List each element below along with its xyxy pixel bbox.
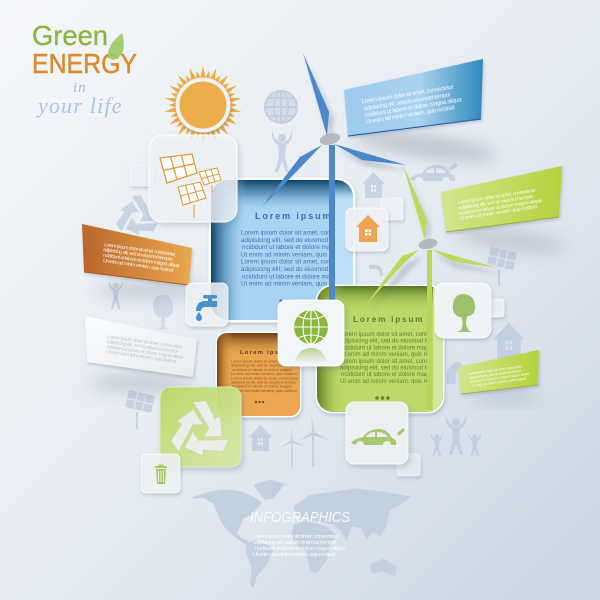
icon: ghost recycle bbox=[110, 195, 158, 242]
icon: house windows bbox=[365, 230, 371, 236]
text block: white ribbon: ncididunt ut labore et dolore magna aliqua bbox=[106, 344, 184, 361]
icon: tree bbox=[453, 294, 475, 332]
text block: green ribbon: adipisicing elit, sed do eiusmod tempor bbox=[458, 194, 534, 211]
text block: blue ribbon: Lorem ipsum dolor sit amet, consectetur bbox=[361, 85, 454, 105]
text block: orange ribbon: Ut enim ad minim veniam, quis nostrud bbox=[103, 258, 174, 274]
subtitle: in: in bbox=[73, 80, 87, 96]
title bbox=[32, 20, 137, 118]
ribbon shadows bbox=[88, 125, 566, 402]
text block: blue panel: adipisicing elit, sed do eiusmod tempor bbox=[241, 266, 350, 273]
icon: ghost solar panel right bbox=[487, 247, 517, 286]
text block: blue ribbon bbox=[361, 85, 463, 125]
text block: green panel: Ut enim ad minim veniam, quis nostrud bbox=[340, 352, 444, 358]
text block: green panel: Lorem ipsum dolor sit amet, consectetur bbox=[340, 359, 447, 365]
dots: orange panel bbox=[255, 401, 264, 403]
icon: solar panels bbox=[160, 154, 221, 218]
wind turbine: green bbox=[364, 165, 502, 410]
world map bbox=[190, 479, 412, 588]
card: house bbox=[346, 208, 388, 251]
text block: blue panel: Ut enim ad minim veniam, quis nostrud bbox=[241, 251, 350, 258]
icon: ghost house bottom bbox=[249, 425, 272, 451]
text block: blue panel: ncididunt ut labore et dolore magna bbox=[242, 244, 341, 251]
text block: small green ribbon: adipisicing elit, sed do eiusmod tempor bbox=[469, 369, 522, 380]
text block: green ribbon bbox=[457, 188, 542, 222]
small tile: house bbox=[381, 198, 403, 220]
text block: orange panel: ncididunt ut labore et dolore magna bbox=[232, 385, 292, 389]
icon: globe reflection bbox=[295, 348, 327, 364]
icon: house bbox=[356, 215, 380, 242]
card: electric car bbox=[346, 402, 408, 464]
text block: green panel: adipisicing elit, sed do eiusmod tempor bbox=[340, 366, 443, 372]
text block: infographics body: Ut enim ad minim veniam, quis nostrud bbox=[253, 552, 335, 558]
ribbon: orange bbox=[82, 224, 192, 285]
small tile: solar bbox=[130, 165, 153, 186]
text block: orange panel: adipisicing elit, sed do eiusmod tempor bbox=[231, 380, 297, 384]
dots: blue panel bbox=[279, 299, 295, 303]
icon: recycling arrows bbox=[163, 401, 229, 465]
text block: orange panel: Ut enim ad minim veniam, quis nostrud bbox=[231, 389, 297, 393]
text block: orange ribbon: Lorem ipsum dolor sit amet, consectetur bbox=[104, 242, 176, 258]
text block: white ribbon: Lorem ipsum dolor sit amet, consectetur bbox=[107, 334, 183, 351]
wind turbine: blue bbox=[262, 53, 408, 302]
ribbon: white bbox=[85, 316, 197, 377]
icon: ghost person left bbox=[109, 280, 123, 309]
ribbon: small green bbox=[458, 350, 539, 394]
text block: orange panel: adipisicing elit, sed do eiusmod tempor bbox=[231, 364, 297, 368]
ribbon: blue bbox=[344, 59, 483, 136]
icon: trash bin bbox=[155, 464, 167, 484]
title word: ENERGY: ENERGY bbox=[32, 48, 137, 79]
heading: green panel: Lorem ipsum bbox=[353, 314, 424, 324]
icon: ghost tree bbox=[153, 295, 173, 330]
dots: green panel bbox=[375, 396, 390, 400]
icon: ghost small wind turbine bbox=[280, 427, 305, 468]
text block: green panel: adipisicing elit, sed do eiusmod tempor bbox=[340, 339, 443, 345]
text block: orange ribbon: adipisicing elit, sed do eiusmod tempor bbox=[103, 247, 173, 263]
subtitle: your life: your life bbox=[36, 93, 123, 118]
small tile: car bbox=[397, 454, 420, 476]
text block: blue panel: Lorem ipsum dolor sit amet, consectetur bbox=[241, 230, 353, 236]
icon: electric car bbox=[351, 428, 405, 445]
text block: green ribbon: Lorem ipsum dolor sit amet, consectetur bbox=[457, 188, 537, 206]
text block: infographics body: Lorem ipsum dolor sit amet, consectetur bbox=[253, 534, 339, 540]
panel: green text window bbox=[316, 284, 447, 414]
card: globe bbox=[278, 300, 344, 366]
panel: blue text window bbox=[208, 178, 356, 322]
text block: orange panel: ncididunt ut labore et dolore magna bbox=[232, 368, 292, 372]
icon: sun bbox=[164, 66, 242, 144]
text block: white ribbon: Ut enim ad minim veniam, quis nostrud bbox=[106, 349, 177, 365]
icon: ghost water tap small bbox=[447, 362, 463, 384]
background icons bbox=[109, 91, 525, 468]
text block: blue panel bbox=[241, 230, 329, 287]
text block: orange ribbon: ncididunt ut labore et dolore magna aliqua bbox=[103, 253, 180, 269]
text block: white ribbon: adipisicing elit, sed do eiusmod tempor bbox=[106, 339, 179, 355]
text block: orange panel bbox=[231, 360, 299, 393]
card: recycling bbox=[160, 387, 241, 467]
icon: globe bbox=[294, 310, 328, 344]
text block: orange panel: Ut enim ad minim veniam, quis nostrud bbox=[231, 372, 297, 376]
text block: infographics body bbox=[253, 534, 346, 558]
text block: green panel bbox=[340, 332, 427, 384]
title word: Green: Green bbox=[32, 20, 108, 51]
text block: green panel: ncididunt ut labore et dolore magna bbox=[341, 372, 436, 378]
card: solar panels bbox=[149, 135, 237, 222]
text block: small green ribbon bbox=[468, 364, 530, 388]
heading: blue panel: Lorem ipsum bbox=[255, 211, 332, 221]
text block: infographics body: ncididunt ut labore et dolore magna aliqua bbox=[255, 546, 346, 552]
text block: orange ribbon bbox=[103, 242, 180, 274]
card: trash bbox=[141, 454, 180, 493]
icon: ghost large wind turbine bbox=[298, 415, 329, 467]
icon: water tap bbox=[196, 295, 217, 321]
text block: green ribbon: ncididunt ut labore et dolore magna aliqua bbox=[458, 198, 542, 217]
text block: blue ribbon: adipisicing elit, sed do eiusmod tempor bbox=[363, 92, 451, 112]
small tile: tree bbox=[487, 299, 504, 317]
text block: blue panel: adipisicing elit, sed do eiusmod tempor bbox=[241, 237, 350, 244]
icon: ghost house right bbox=[493, 323, 525, 358]
text block: orange panel: Lorem ipsum dolor sit amet, consectetur bbox=[231, 376, 299, 380]
text block: blue panel: Lorem ipsum dolor sit amet, consectetur bbox=[241, 259, 353, 266]
icon: ghost car bbox=[410, 163, 458, 181]
text block: blue ribbon: Ut enim ad minim veniam, quis nostrud bbox=[365, 105, 455, 125]
infographics caption bbox=[250, 510, 350, 558]
heading: infographics: INFOGRAPHICS bbox=[250, 510, 350, 526]
card: water tap bbox=[186, 283, 228, 326]
icon: ghost tap bbox=[369, 265, 383, 276]
icon: ghost house top bbox=[362, 172, 385, 198]
text block: orange panel: Lorem ipsum dolor sit amet, consectetur bbox=[231, 360, 299, 364]
text block: green panel: Ut enim ad minim veniam, quis nostrud bbox=[340, 379, 444, 385]
text block: green ribbon: Ut enim ad minim veniam, quis nostrud bbox=[459, 204, 538, 222]
text block: white ribbon bbox=[106, 334, 184, 365]
text block: small green ribbon: ncididunt ut labore et dolore magna aliqua bbox=[470, 372, 530, 384]
ribbon: green bbox=[441, 166, 562, 232]
icon: ghost person bbox=[272, 130, 292, 172]
panel: orange text window bbox=[216, 332, 302, 418]
text block: blue panel: Ut enim ad minim veniam, quis nostrud bbox=[241, 281, 350, 288]
icon: ghost solar panel left bbox=[125, 390, 155, 429]
text block: infographics body: adipisicing elit, sed do eiusmod tempor bbox=[253, 540, 336, 546]
icon: ghost globe bbox=[265, 91, 297, 123]
text block: small green ribbon: Ut enim ad minim veniam, quis nostrud bbox=[472, 376, 527, 388]
card: tree bbox=[435, 283, 491, 338]
icon: ghost people group bbox=[430, 415, 481, 456]
text block: blue ribbon: ncididunt ut labore et dolore magna aliqua bbox=[364, 97, 463, 119]
icon: leaf bbox=[108, 33, 124, 60]
text block: green panel: ncididunt ut labore et dolore magna bbox=[341, 345, 436, 351]
text block: green panel: Lorem ipsum dolor sit amet, consectetur bbox=[340, 332, 447, 338]
heading: orange panel: Lorem ipsum bbox=[240, 350, 291, 356]
text block: blue panel: ncididunt ut labore et dolore magna bbox=[242, 273, 341, 280]
text block: small green ribbon: Lorem ipsum dolor sit amet, consectetur bbox=[468, 364, 523, 376]
